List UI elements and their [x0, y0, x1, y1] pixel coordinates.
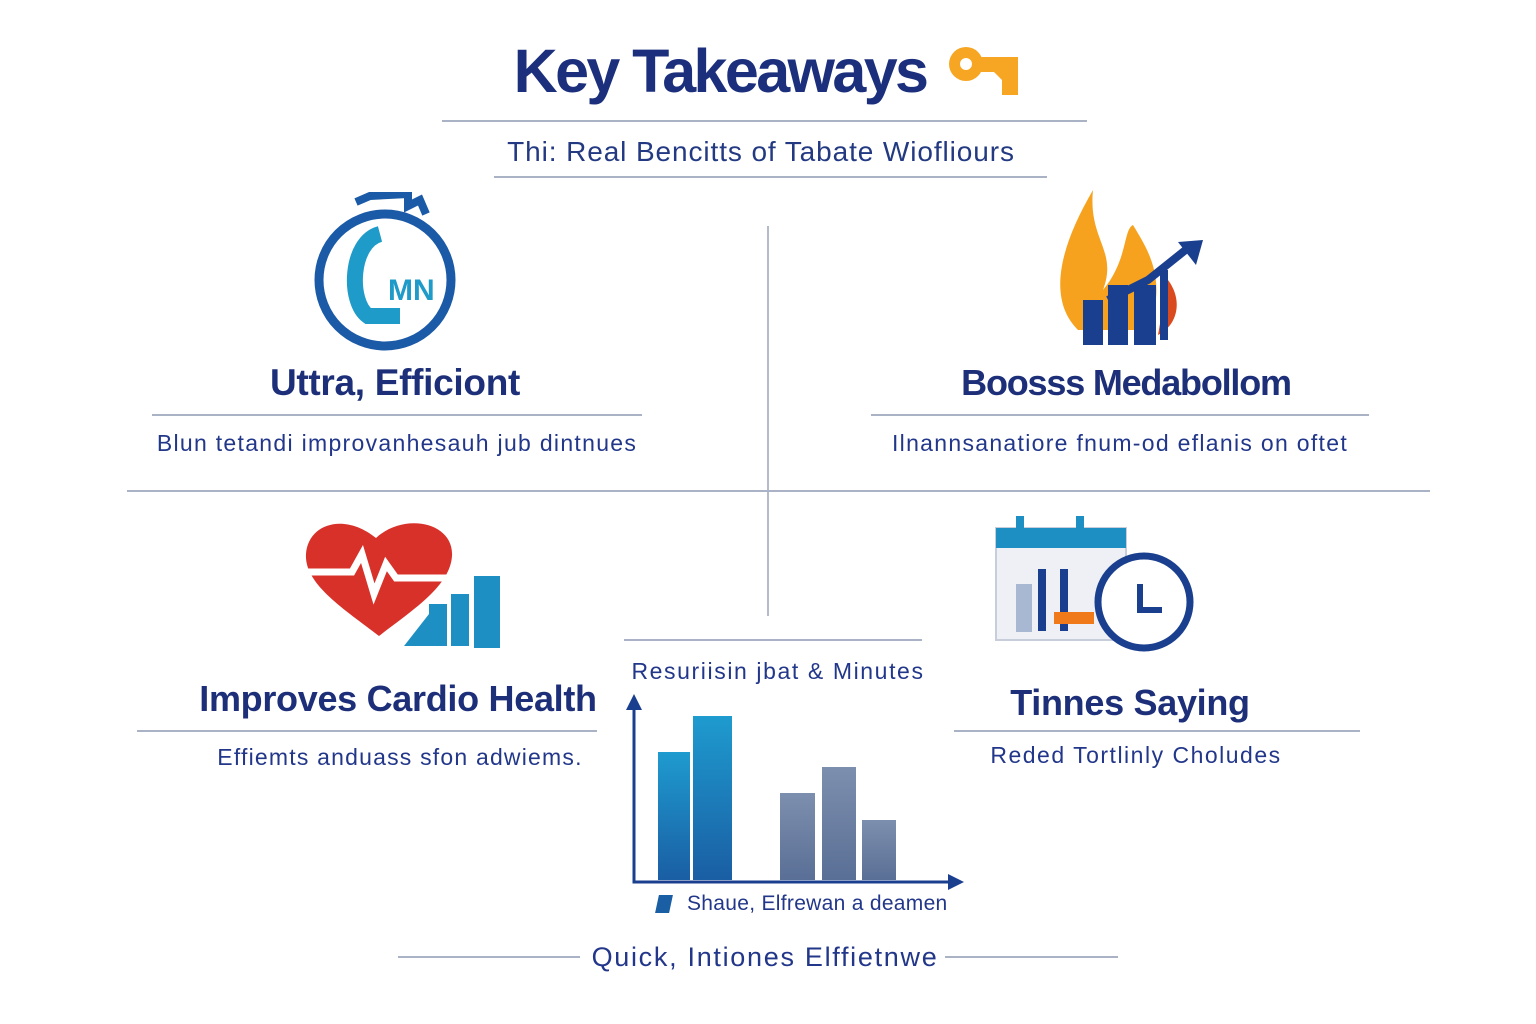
subtitle: Thi: Real Bencitts of Tabate Wiofliours — [507, 136, 1015, 167]
legend: Shaue, Elfrewan a deamen — [687, 892, 948, 915]
panel: boosts metabolism — [871, 190, 1369, 456]
bar chart — [624, 639, 964, 915]
panel: cardio health — [137, 523, 597, 770]
description: Blun tetandi improvanhesauh jub dintnues — [157, 430, 637, 456]
icon: stopwatch — [314, 192, 456, 350]
description: Ilnannsanatiore fnum-od eflanis on oftet — [892, 430, 1348, 456]
heading: Improves Cardio Health — [199, 678, 597, 719]
description: Effiemts anduass sfon adwiems. — [217, 744, 583, 770]
panel: time saving — [954, 516, 1360, 768]
chart title: Resuriisin jbat & Minutes — [631, 658, 925, 684]
title: Key Takeaways — [514, 37, 926, 105]
heading: Tinnes Saying — [1010, 682, 1250, 723]
icon: calendar and clock — [995, 516, 1194, 652]
icon: heart with chart — [306, 523, 500, 648]
icon: flame with chart — [1060, 190, 1203, 345]
icon: stopwatch: MN — [388, 274, 435, 307]
heading: Boosss Medabollom — [961, 362, 1291, 403]
footer: Quick, Intiones Elffietnwe — [592, 942, 938, 972]
icon: key — [949, 47, 1018, 95]
heading: Uttra, Efficiont — [270, 362, 520, 403]
description: Reded Tortlinly Choludes — [990, 742, 1282, 768]
panel: ultra efficient — [152, 192, 642, 456]
